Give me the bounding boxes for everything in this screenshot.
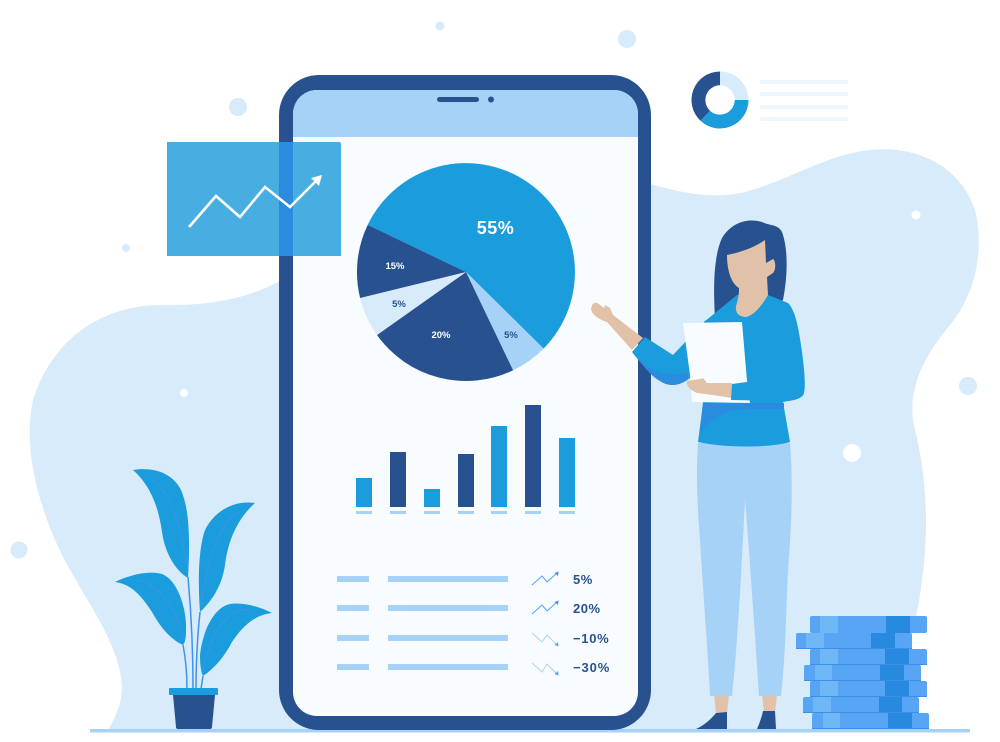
coin 7 xyxy=(812,713,929,729)
ankles xyxy=(714,694,777,714)
phone speaker and camera xyxy=(437,96,494,102)
pie labels xyxy=(385,218,518,341)
row minus 10 percent xyxy=(337,631,609,646)
row minus 30 percent xyxy=(337,660,610,676)
pie labels: 5% xyxy=(392,299,406,310)
pie labels: 5% xyxy=(504,330,518,341)
card overlap on phone frame xyxy=(279,142,293,256)
bar chart xyxy=(356,405,575,514)
raised arm and hand xyxy=(591,303,643,350)
shirt shadow at waist xyxy=(700,403,784,433)
clipboard paper xyxy=(683,322,750,403)
row 5 percent xyxy=(337,572,593,587)
coin 2 xyxy=(796,633,912,649)
donut chart xyxy=(691,71,748,129)
coin 1 xyxy=(810,616,927,633)
leaf veins xyxy=(138,478,247,670)
pot rim xyxy=(169,688,218,695)
coin 5 xyxy=(810,681,927,697)
slice 55 percent xyxy=(368,163,575,349)
phone frame xyxy=(279,75,651,730)
torso xyxy=(698,295,805,446)
slice 20 percent xyxy=(377,272,513,381)
trousers xyxy=(697,443,792,696)
coin 6 xyxy=(803,697,919,713)
coin 4 xyxy=(804,665,921,681)
forearm sleeve xyxy=(731,300,804,401)
leaves xyxy=(115,469,272,676)
pie labels: 15% xyxy=(385,261,405,272)
pie labels: 20% xyxy=(431,330,451,341)
phone xyxy=(279,75,651,730)
slice 15 percent xyxy=(357,225,466,298)
line chart card xyxy=(167,142,341,256)
donut legend lines xyxy=(760,80,848,121)
rising arrow line xyxy=(189,175,322,227)
lower hand xyxy=(687,378,732,398)
background blob xyxy=(30,149,979,730)
woman presenting xyxy=(591,221,805,729)
face and neck xyxy=(727,240,775,317)
ground line xyxy=(90,729,970,732)
pot xyxy=(173,695,215,729)
plant xyxy=(115,469,272,729)
phone header band xyxy=(293,90,638,137)
left sleeve xyxy=(632,320,708,385)
coin stack xyxy=(796,616,929,729)
pie chart xyxy=(357,163,575,381)
card panel xyxy=(167,142,341,256)
sleeve shadow xyxy=(638,359,688,385)
decorative dots xyxy=(10,22,977,558)
row 20 percent xyxy=(337,600,601,616)
row minus 10 percent: −10% xyxy=(573,631,609,646)
coin 3 xyxy=(810,649,927,665)
row 20 percent: 20% xyxy=(573,601,601,616)
row 5 percent: 5% xyxy=(573,572,593,587)
slice pale 5 percent xyxy=(360,272,466,335)
hair xyxy=(714,221,787,318)
phone screen xyxy=(293,90,638,716)
stats list xyxy=(337,572,610,676)
slice light 5 percent xyxy=(466,272,544,370)
pie labels: 55% xyxy=(477,218,514,238)
row minus 30 percent: −30% xyxy=(573,660,610,675)
stems xyxy=(183,577,203,689)
shoes xyxy=(696,711,776,729)
